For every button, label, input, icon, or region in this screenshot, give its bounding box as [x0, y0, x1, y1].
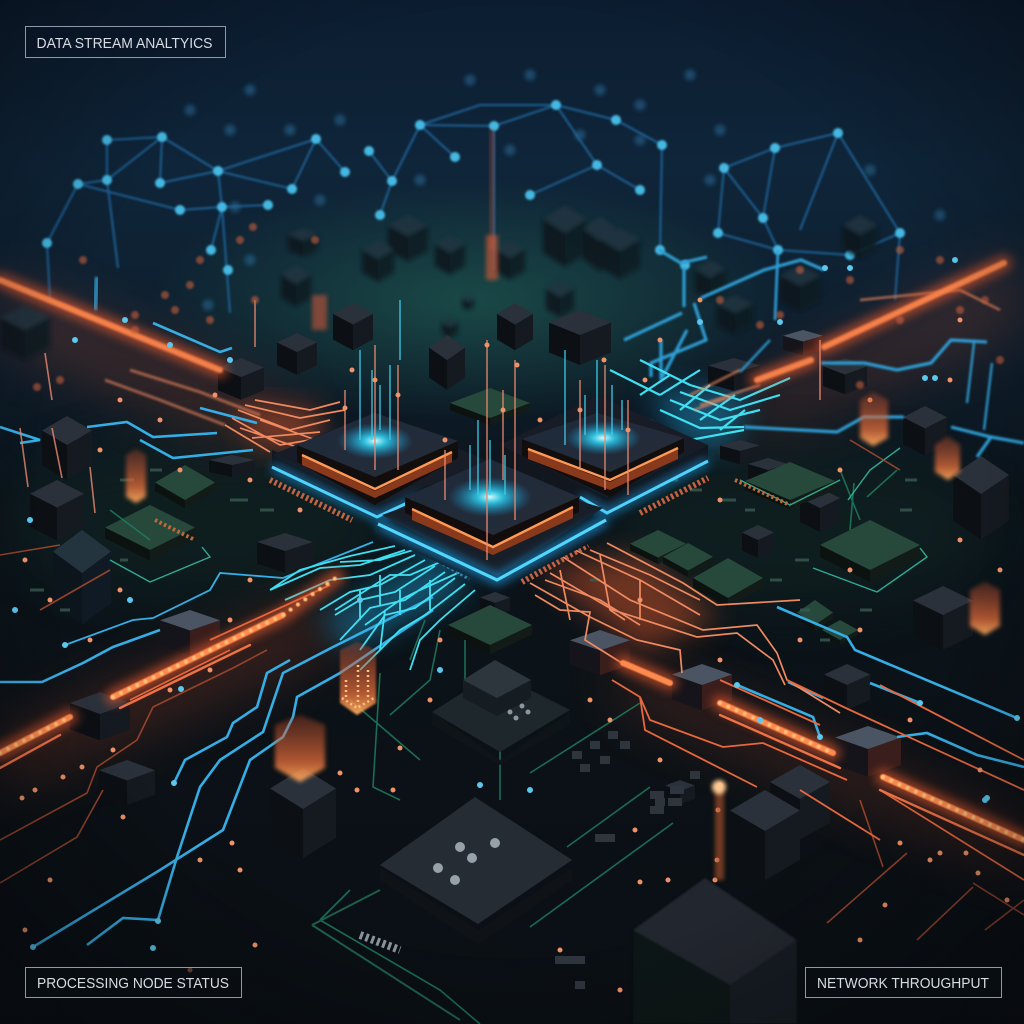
cube: right: [935, 436, 960, 480]
centre mesh: [369, 105, 662, 270]
cube: far right: [970, 582, 1000, 635]
mid components: [30, 303, 1009, 880]
right mesh: [718, 133, 900, 320]
orange bundle: [105, 290, 1024, 880]
cube: right upper: [860, 392, 888, 446]
pin rows: [155, 478, 790, 582]
label: data stream analytics: [26, 26, 226, 58]
distant components: [0, 205, 877, 360]
bright orange streaks: [0, 263, 1024, 855]
processor: foreground: [380, 797, 572, 945]
beam: lower centre: [712, 780, 726, 880]
label: processing node status: [26, 968, 242, 998]
processor: bottom right: [633, 878, 797, 1024]
label: network throughput: [806, 968, 1002, 998]
chip: left: [272, 412, 490, 517]
orange bokeh: [37, 227, 1000, 387]
blurred upper-right traces: [624, 250, 1024, 457]
cube: mid-left: [340, 642, 376, 715]
green outline board: [312, 890, 460, 1020]
label: network throughput: NETWORK THROUGHPUT: [817, 976, 989, 992]
network nodes: [47, 105, 900, 270]
module: centre block: [432, 660, 570, 765]
blue sparks: [15, 260, 1017, 948]
chip: right: [500, 395, 708, 514]
sparks: [22, 300, 1007, 990]
glowing orange cubes: [126, 392, 1000, 880]
orange vertical beam: [312, 130, 498, 330]
cyan bundle: [270, 360, 790, 670]
dim circuit traces: [0, 440, 1024, 1024]
data streams: [20, 300, 820, 560]
network graph: [47, 105, 900, 320]
blue traces: [0, 277, 1024, 947]
faint bokeh: [190, 75, 940, 305]
cube: left: [126, 449, 146, 503]
label: data stream analytics: DATA STREAM ANALTYICS: [36, 36, 212, 52]
left mesh: [47, 137, 345, 313]
cube: foreground-left: [270, 715, 336, 858]
green dot circuit texture: [30, 470, 917, 640]
small parts: [555, 735, 700, 985]
chip: centre: [378, 459, 606, 590]
label: processing node status: PROCESSING NODE STATUS: [37, 976, 229, 992]
connector pads: [360, 935, 400, 950]
pads: [438, 843, 495, 880]
